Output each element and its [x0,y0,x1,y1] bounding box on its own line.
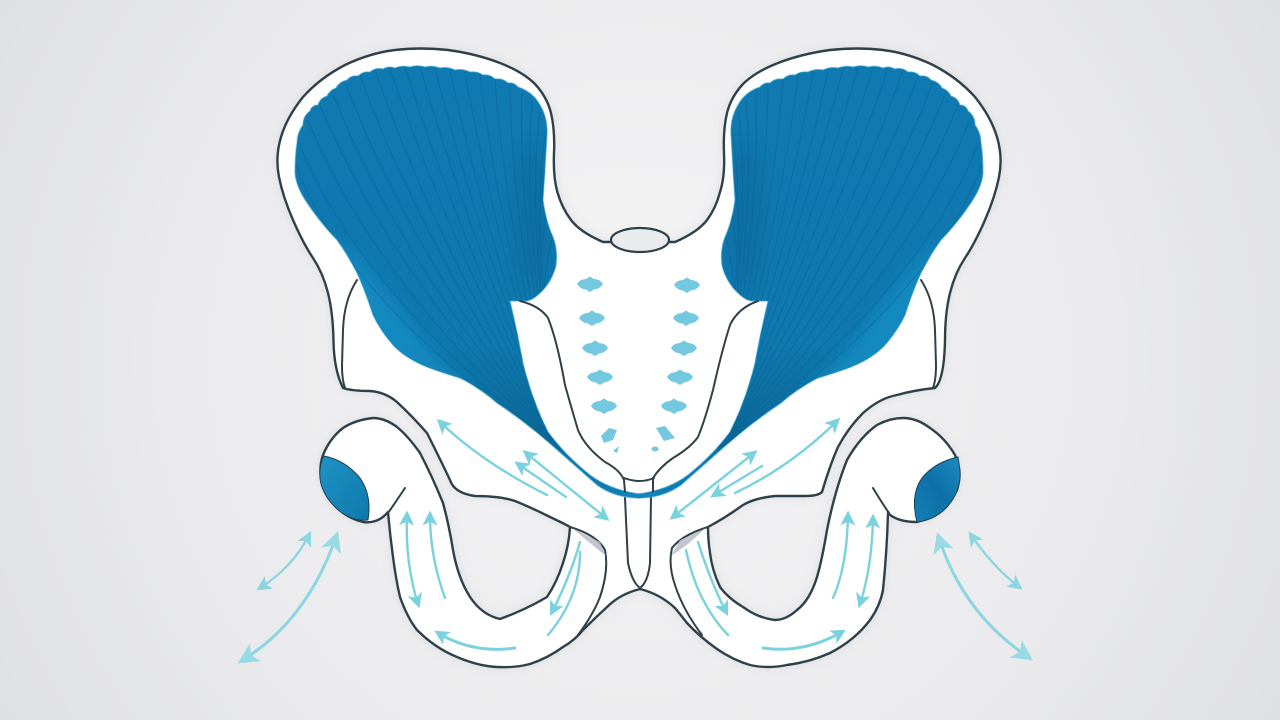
muscle tendon bar [622,493,656,496]
muscle: left iliacus [295,66,640,498]
left hip socket [320,456,369,520]
arrows: left side [243,422,606,660]
sacral foramina [577,276,700,453]
shading near pubic rami [572,528,706,556]
right hip socket [914,457,960,522]
arrows: right side [673,421,1028,657]
muscle: right iliacus [638,66,983,498]
anatomical inner lines [342,280,936,635]
pelvis bone silhouette [277,48,1001,667]
sacral promontory [611,228,669,252]
